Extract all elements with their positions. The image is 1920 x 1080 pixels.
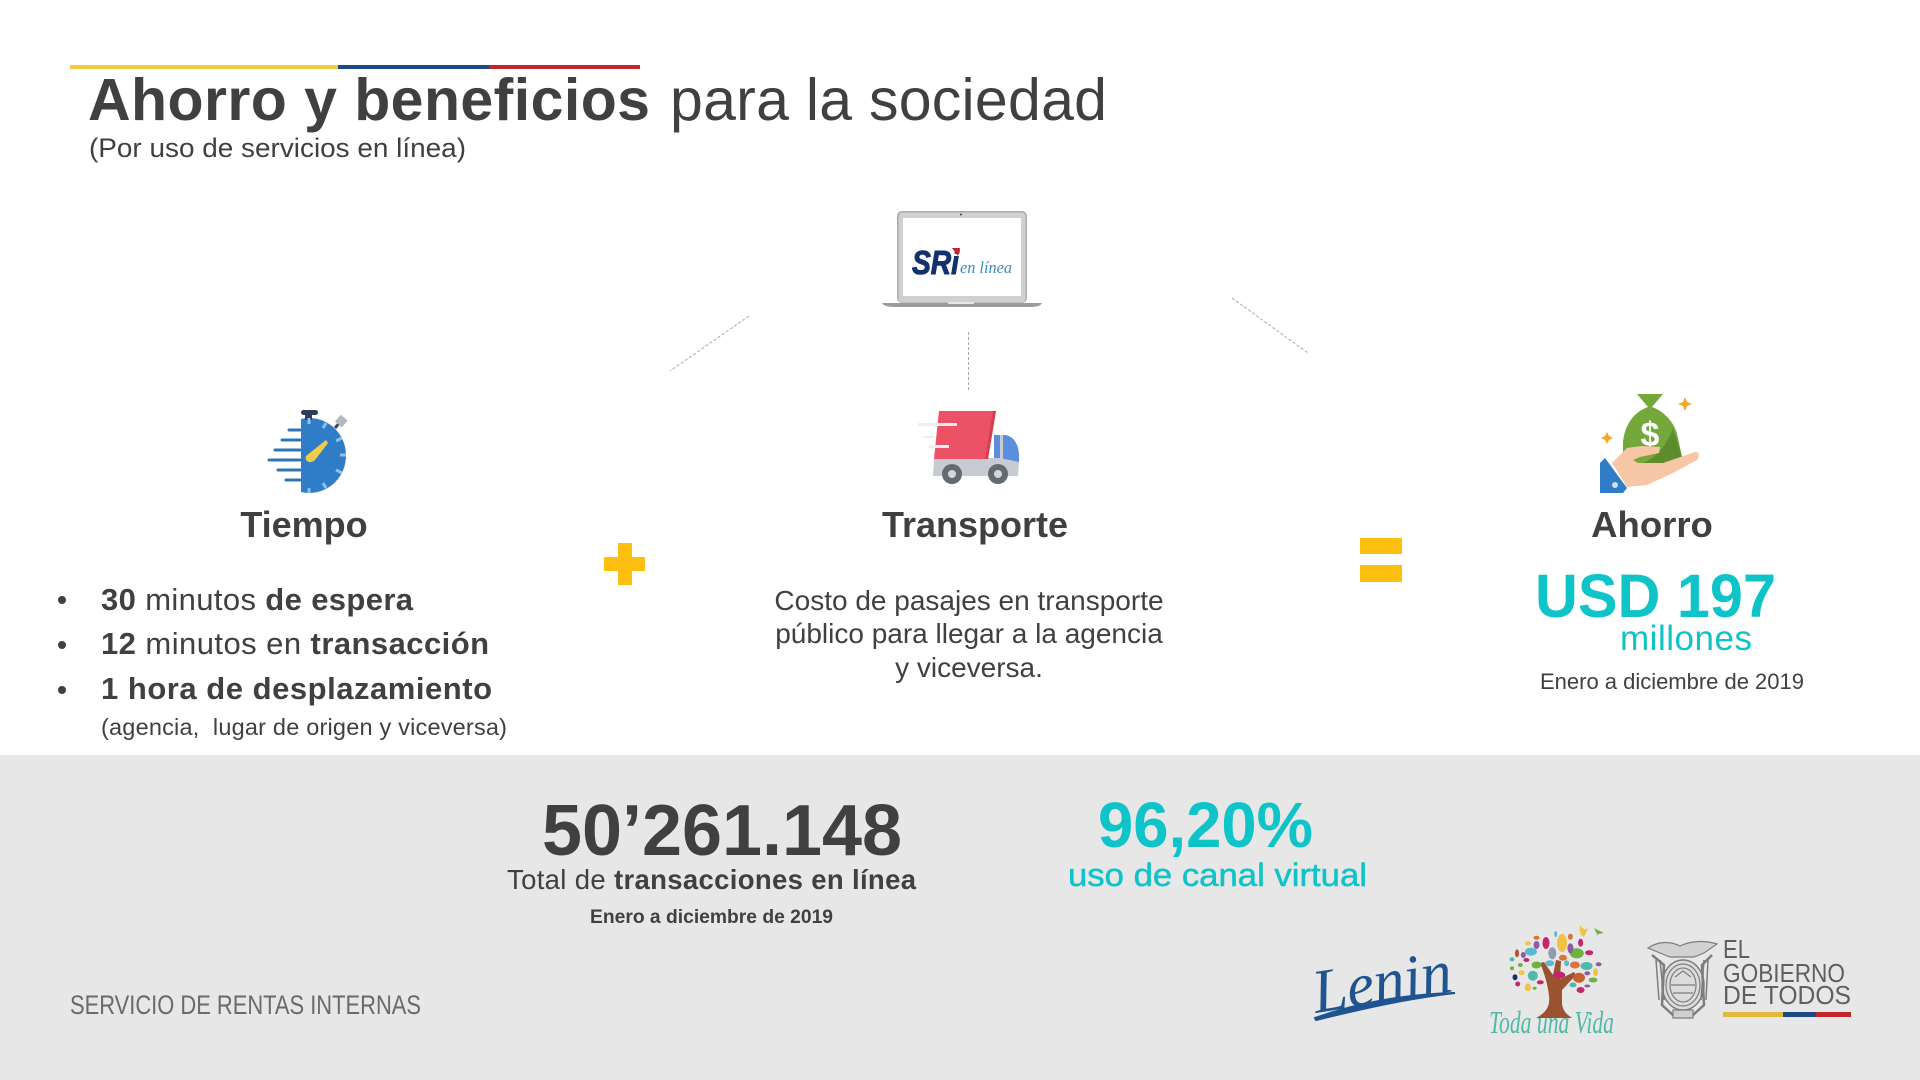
icon: hand holding money bag — [1600, 394, 1699, 493]
bullet list: 30 minutos de espera — [101, 582, 414, 617]
icon: stopwatch — [269, 410, 348, 493]
heading: Ahorro: Ahorro — [1591, 504, 1713, 545]
title: para la sociedad — [670, 67, 1107, 133]
title — [88, 67, 1107, 133]
tricolor header line — [70, 65, 640, 69]
heading: Transporte: Transporte — [882, 504, 1068, 545]
icon: laptop with SRI en linea: en línea — [960, 258, 1012, 277]
logo: Toda una Vida tree — [1489, 925, 1614, 1040]
transport description: Costo de pasajes en transporte — [774, 585, 1164, 616]
bullet list: 12 minutos en transacción — [101, 626, 489, 661]
logo: El Gobierno de Todos: EL — [1723, 934, 1750, 964]
icon: truck — [918, 411, 1019, 484]
title: Ahorro y beneficios — [88, 67, 650, 133]
total transactions figure: Total de transacciones en línea — [507, 864, 917, 895]
transport description — [774, 585, 1164, 683]
savings figure: USD 197 — [1535, 562, 1776, 630]
bullet list: 1 hora de desplazamiento — [101, 671, 492, 706]
icon: laptop with SRI en linea: SRi — [912, 244, 960, 281]
virtual channel figure — [1068, 789, 1367, 893]
total transactions figure: Enero a diciembre de 2019 — [590, 907, 833, 928]
savings figure: millones — [1620, 619, 1752, 658]
logo: El Gobierno de Todos: DE TODOS — [1723, 980, 1851, 1010]
bottom gray band — [0, 755, 1920, 1080]
dashed connector middle — [968, 332, 970, 390]
heading: Tiempo: Tiempo — [240, 504, 368, 545]
icon: laptop with SRI en linea — [882, 211, 1042, 307]
total transactions figure — [507, 791, 917, 928]
subtitle: (Por uso de servicios en línea) — [89, 133, 466, 163]
logo: Lenin signature: Lenin — [1307, 938, 1456, 1027]
equals sign — [1360, 538, 1402, 582]
dashed connector left — [670, 316, 749, 371]
logo: El Gobierno de Todos: GOBIERNO — [1723, 958, 1845, 988]
transport description: público para llegar a la agencia — [775, 618, 1163, 649]
logo: El Gobierno de Todos — [1723, 934, 1851, 1017]
logo: coat of arms — [1648, 942, 1717, 1018]
dashed connector right — [1232, 298, 1308, 353]
plus sign — [604, 543, 645, 585]
transport description: y viceversa. — [895, 652, 1043, 683]
virtual channel figure: 96,20% — [1098, 789, 1313, 861]
icon: hand holding money bag: $ — [1641, 416, 1660, 454]
savings figure — [1535, 562, 1804, 694]
total transactions figure: 50’261.148 — [542, 791, 902, 871]
logo: Toda una Vida tree: Toda una Vida — [1489, 1004, 1614, 1040]
virtual channel figure: uso de canal virtual — [1068, 857, 1367, 893]
bullet list — [58, 582, 507, 740]
savings figure: Enero a diciembre de 2019 — [1540, 669, 1804, 694]
footer organization name: SERVICIO DE RENTAS INTERNAS — [70, 990, 421, 1020]
bullet list: (agencia, lugar de origen y viceversa) — [101, 714, 507, 740]
